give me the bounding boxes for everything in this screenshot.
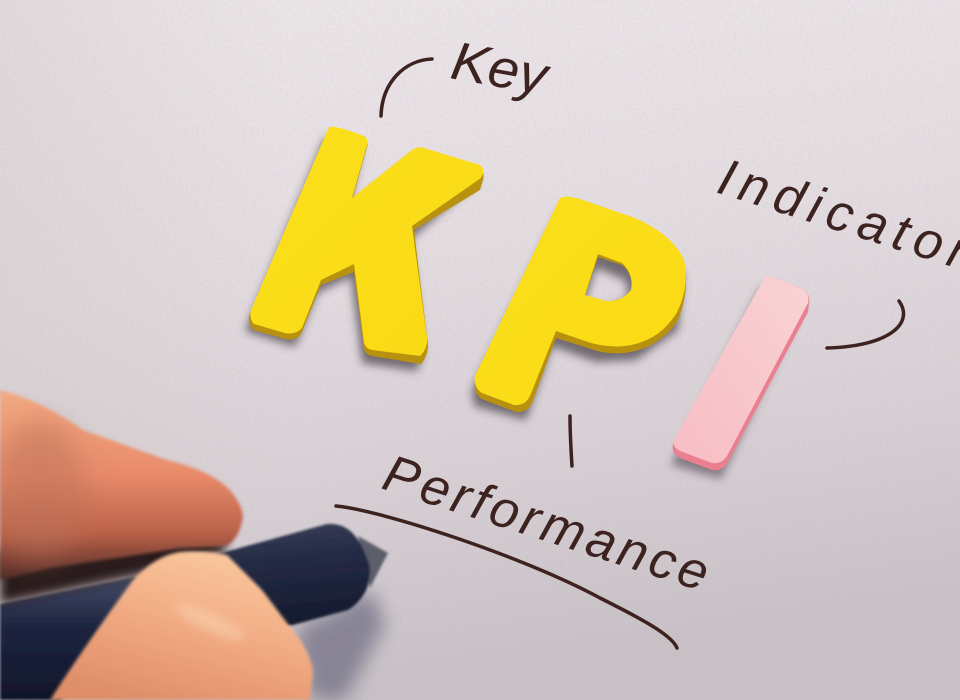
curved line from Key bbox=[381, 59, 432, 116]
underline below Performance bbox=[336, 506, 677, 648]
pen bbox=[0, 524, 388, 700]
letter K bbox=[245, 127, 484, 371]
knuckle highlight bbox=[172, 598, 248, 646]
crease tone on finger bbox=[0, 420, 85, 560]
letter P bbox=[472, 197, 686, 420]
handwritten word: Performance: Performance bbox=[376, 444, 716, 603]
hand: lower finger bbox=[50, 551, 313, 700]
hand: upper finger bbox=[0, 390, 243, 580]
pen tip bbox=[358, 536, 388, 588]
vertical line above Performance bbox=[570, 416, 572, 466]
curved line from Indicator bbox=[827, 301, 904, 348]
hand: dark shadow between fingers bbox=[0, 538, 225, 604]
pen shadow bbox=[295, 590, 385, 700]
letter I bbox=[671, 276, 809, 479]
pen barrel bbox=[130, 524, 370, 640]
pen lower section bbox=[0, 577, 200, 700]
handwritten word: Key: Key bbox=[447, 31, 555, 107]
